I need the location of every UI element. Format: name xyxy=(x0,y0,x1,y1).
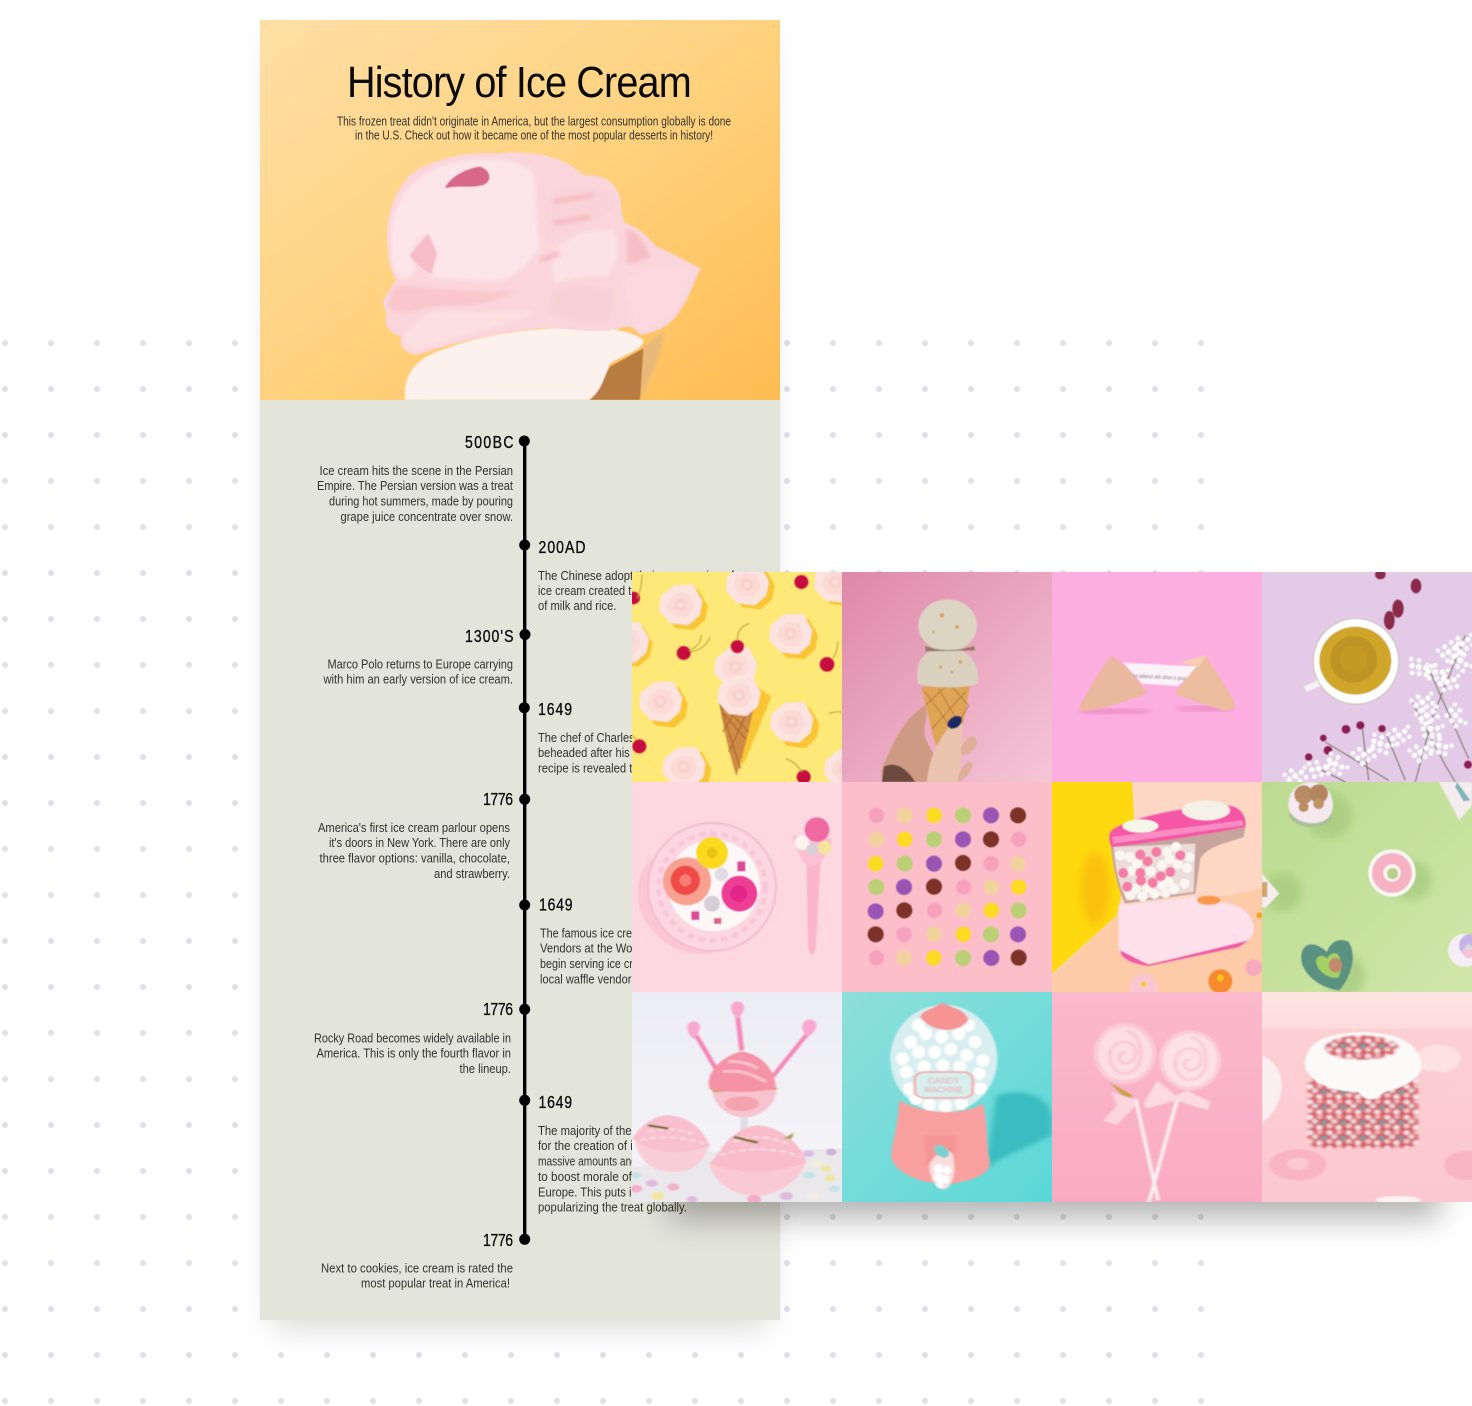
timeline entry: 1776 rocky road: the lineup. xyxy=(460,1061,511,1076)
photo grid xyxy=(606,562,1472,1204)
timeline entry: 1776 cookies: most popular treat in America! xyxy=(361,1276,510,1290)
timeline entry: 1649 cone: begin serving ice cream with help from xyxy=(540,956,724,971)
photo: pink candy dispenser xyxy=(1052,782,1262,992)
timeline entry: 1776 parlour xyxy=(318,789,513,881)
timeline entry: 1649 war: massive amounts and sent overseas xyxy=(538,1154,703,1168)
timeline entry: 200AD: ice cream created through a process xyxy=(538,583,716,598)
panel: header with gradient xyxy=(260,20,780,400)
photo: rows of colored cookies xyxy=(842,782,1052,992)
panel: timeline background xyxy=(260,400,780,1320)
timeline entry: 1776 parlour: America's first ice cream parlour opens xyxy=(318,820,510,835)
timeline entry: 500BC: 500BC xyxy=(465,432,514,452)
timeline entry: 200AD: The Chinese adopt their own version of xyxy=(538,568,734,583)
photo: hand holding ice cream cone xyxy=(842,572,1052,782)
intro text: in the U.S. Check out how it became one of the most popular desserts in history! xyxy=(355,128,713,142)
timeline entry: 1776 cookies: Next to cookies, ice cream is rated the xyxy=(321,1260,513,1276)
photo: sweets on green background xyxy=(1262,782,1472,992)
photo: pink sundae and cupcakes xyxy=(632,992,842,1202)
timeline entry: 1300'S: Marco Polo returns to Europe carrying xyxy=(328,656,513,672)
photo: fortune cookie xyxy=(1052,572,1262,782)
timeline entry: 1649 cone: local waffle vendors. xyxy=(540,972,640,986)
timeline entry: 1776 rocky road xyxy=(314,999,513,1076)
photo: flower plate and spoon xyxy=(632,782,842,992)
timeline entry: 1776 rocky road: Rocky Road becomes widely available in xyxy=(314,1030,511,1046)
timeline entry: 1649 chef: recipe is revealed to the public. xyxy=(538,760,693,776)
timeline entry: 1776 cookies: 1776 xyxy=(483,1230,513,1250)
timeline entry: 1776 parlour: it's doors in New York. There are only xyxy=(329,835,510,850)
photo: pink lollipops xyxy=(1052,992,1262,1202)
timeline entry: 1776 parlour: 1776 xyxy=(483,789,513,809)
photo: candy machine on teal: MACHINE xyxy=(924,1086,963,1095)
intro text xyxy=(337,114,731,142)
timeline axis xyxy=(519,436,530,1245)
photo: candy machine on teal: CANDY xyxy=(928,1077,960,1086)
timeline entry: 1776 cookies xyxy=(321,1230,513,1290)
timeline entry: 1300'S: with him an early version of ice cream. xyxy=(323,672,513,686)
photo: tea cup and baby's breath flowers xyxy=(1262,572,1472,782)
photo: fortune cookie: your patience with others is good. xyxy=(1130,673,1187,682)
timeline entry: 1300'S: 1300'S xyxy=(465,626,514,646)
timeline entry: 500BC: Empire. The Persian version was a treat xyxy=(317,478,513,493)
intro text: This frozen treat didn't originate in America, but the largest consumption globally is done xyxy=(337,114,731,128)
photo: rose and cherry pattern xyxy=(632,572,842,782)
photo: candy machine on teal xyxy=(842,992,1052,1202)
timeline entry: 1649 cone xyxy=(539,895,734,986)
timeline entry: 1649 war: 1649 xyxy=(538,1092,572,1112)
timeline entry: 1649 war xyxy=(538,1092,720,1214)
timeline entry: 500BC xyxy=(317,432,514,524)
timeline entry: 1649 cone: The famous ice cream cone is born. xyxy=(540,926,712,940)
timeline entry: 1649 cone: Vendors at the World's Fair in St. Louis xyxy=(540,940,734,956)
timeline entry: 200AD xyxy=(538,537,734,613)
timeline entry: 1300'S xyxy=(323,626,514,686)
photo: sprinkles jar xyxy=(1262,992,1472,1202)
timeline entry: 500BC: during hot summers, made by pouring xyxy=(329,494,513,508)
timeline entry: 1649 chef: 1649 xyxy=(538,699,572,719)
title: History of Ice Cream xyxy=(347,57,692,106)
timeline entry: 1649 chef: beheaded after his secret ice cream xyxy=(538,745,714,760)
timeline entry: 1649 chef: The chef of Charles I of England is xyxy=(538,730,708,745)
timeline entry: 1649 war: to boost morale of soldiers in xyxy=(538,1169,688,1184)
timeline entry: 500BC: Ice cream hits the scene in the Persian xyxy=(320,463,513,478)
photo: ice cream scoop xyxy=(382,152,701,400)
timeline entry: 1649 war: popularizing the treat globally. xyxy=(538,1200,687,1214)
timeline entry: 1649 cone: 1649 xyxy=(539,895,573,915)
timeline entry: 1649 chef xyxy=(538,699,714,776)
timeline entry: 200AD: of milk and rice. xyxy=(538,598,616,613)
timeline entry: 1776 rocky road: America. This is only the fourth flavor in xyxy=(316,1046,511,1060)
timeline entry: 1776 rocky road: 1776 xyxy=(483,999,513,1019)
timeline entry: 1649 war: Europe. This puts ice cream first, xyxy=(538,1184,702,1200)
timeline entry: 1776 parlour: and strawberry. xyxy=(434,866,510,881)
timeline entry: 1649 war: for the creation of ice cream in xyxy=(538,1138,692,1153)
timeline entry: 200AD: 200AD xyxy=(538,537,586,557)
timeline entry: 1776 parlour: three flavor options: vanilla, chocolate, xyxy=(320,850,510,866)
timeline entry: 500BC: grape juice concentrate over snow. xyxy=(340,509,513,524)
timeline entry: 1649 war: The majority of the U.S. supply goes xyxy=(538,1123,720,1138)
